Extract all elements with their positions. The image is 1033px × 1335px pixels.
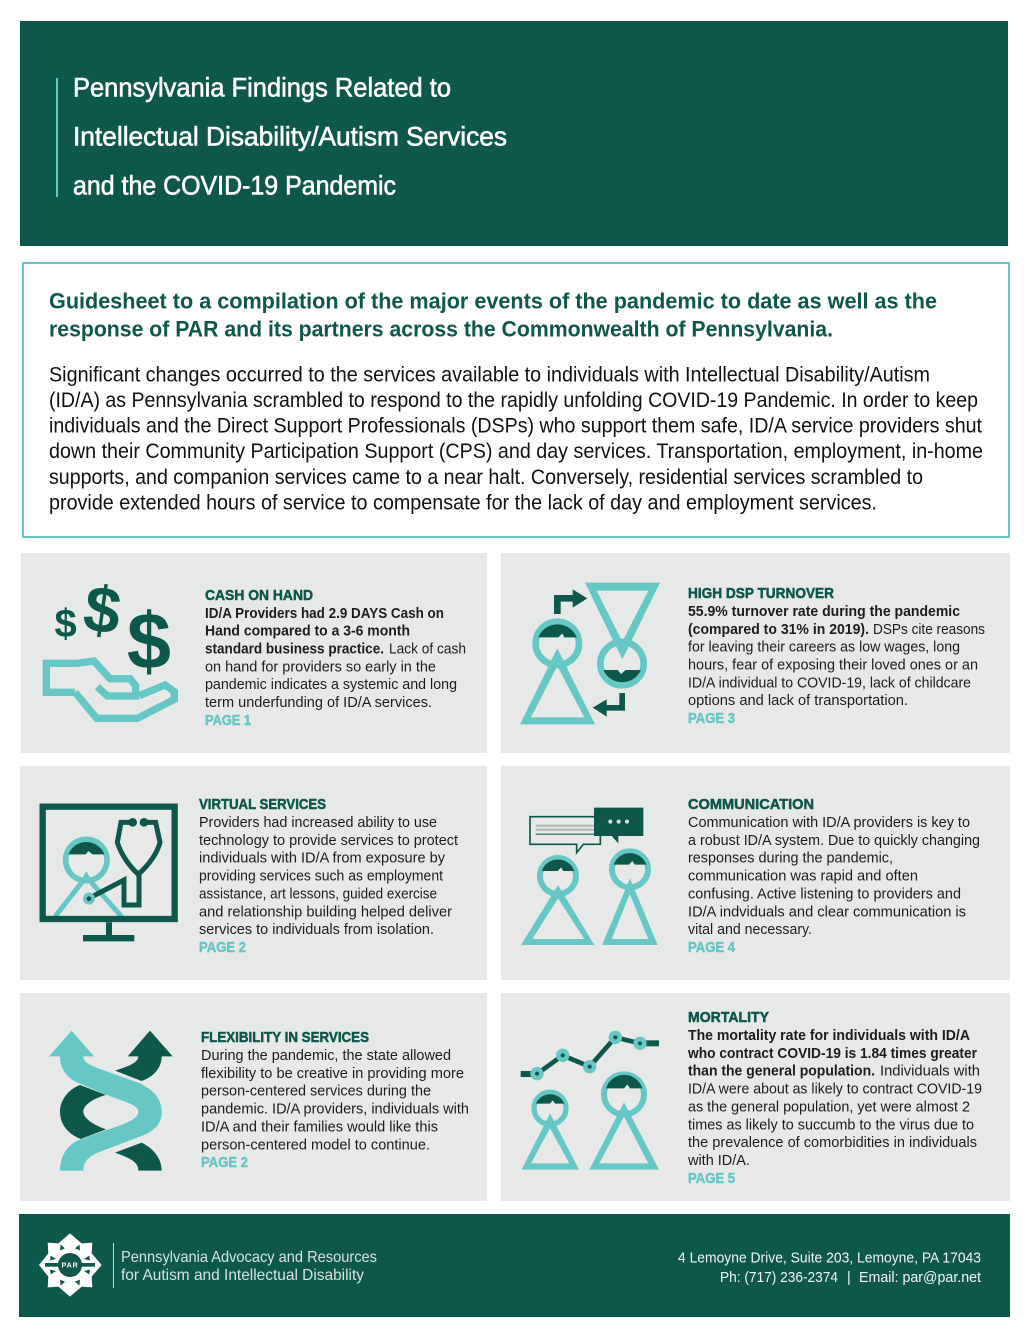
- virtual services text: [199, 797, 458, 956]
- panel: virtual services: [20, 766, 487, 980]
- intro paragraph: down their Community Participation Support (CPS) and day services. Transportation, employment, in-home: [49, 440, 983, 463]
- intro paragraph: Significant changes occurred to the services available to individuals with Intellectual Disability/Autism: [49, 364, 930, 386]
- flexibility in services text: During the pandemic, the state allowed: [201, 1048, 451, 1064]
- communication text: confusing. Active listening to providers and: [688, 886, 961, 902]
- icon: intertwined arrows: [49, 1031, 173, 1171]
- header banner: [20, 21, 1008, 246]
- cash on hand text: ID/A Providers had 2.9 DAYS Cash on: [205, 606, 444, 622]
- flexibility in services text: flexibility to be creative in providing more: [201, 1066, 464, 1082]
- intro heading: [49, 288, 937, 342]
- virtual services text: individuals with ID/A from exposure by: [199, 851, 446, 867]
- flexibility in services text: ID/A and their families would like this: [201, 1119, 438, 1135]
- flexibility in services text: person-centered services during the: [201, 1084, 431, 1100]
- icon: hand with dollar signs: $: [127, 596, 171, 685]
- cash on hand text: Hand compared to a 3-6 month: [205, 624, 410, 640]
- logo: PAR star: [39, 1233, 102, 1297]
- contact details: |: [847, 1270, 851, 1286]
- icon: hand with dollar signs: $: [79, 571, 125, 649]
- panel: flexibility in services: [20, 993, 487, 1201]
- organization name: [121, 1249, 377, 1284]
- virtual services text: technology to provide services to protect: [199, 833, 458, 849]
- communication text: vital and necessary.: [688, 922, 812, 938]
- flexibility in services text: [201, 1030, 469, 1171]
- high DSP turnover text: options and lack of transportation.: [688, 693, 908, 709]
- panel: cash on hand: [21, 553, 487, 753]
- flexibility in services text: FLEXIBILITY IN SERVICES: [201, 1030, 369, 1046]
- high DSP turnover text: HIGH DSP TURNOVER: [688, 586, 834, 602]
- communication text: PAGE 4: [688, 940, 736, 956]
- mortality text: [687, 1010, 982, 1187]
- intro paragraph: supports, and companion services came to a near halt. Conversely, residential services scrambled to: [49, 466, 923, 489]
- cash on hand text: pandemic indicates a systemic and long: [205, 677, 457, 693]
- flexibility in services text: PAGE 2: [201, 1155, 248, 1171]
- panel: introduction: [23, 263, 1009, 537]
- cash on hand text: [205, 588, 466, 729]
- mortality text: PAGE 5: [688, 1171, 735, 1187]
- high DSP turnover text: 55.9% turnover rate during the pandemic: [688, 604, 960, 620]
- communication text: COMMUNICATION: [688, 797, 814, 813]
- cash on hand text: CASH ON HAND: [205, 588, 313, 604]
- mortality text: ID/A were about as likely to contract COVID-19: [688, 1082, 982, 1098]
- mortality text: The mortality rate for individuals with ID/A: [688, 1028, 970, 1044]
- icon: hand with dollar signs: [46, 571, 174, 718]
- title: and the COVID-19 Pandemic: [73, 170, 396, 200]
- intro paragraph: individuals and the Direct Support Professionals (DSPs) who support them safe, ID/A service providers shut: [49, 414, 982, 438]
- virtual services text: and relationship building helped deliver: [199, 904, 452, 920]
- title: [73, 72, 507, 200]
- mortality text: than the general population.: [688, 1064, 875, 1080]
- contact details: Ph: (717) 236-2374: [720, 1270, 838, 1286]
- virtual services text: assistance, art lessons, guided exercise: [199, 886, 437, 902]
- high DSP turnover text: [688, 586, 985, 727]
- high DSP turnover text: for leaving their careers as low wages, long: [688, 640, 960, 656]
- communication text: communication was rapid and often: [688, 869, 918, 885]
- mortality text: who contract COVID-19 is 1.84 times greater: [687, 1046, 977, 1062]
- intro paragraph: [49, 364, 983, 514]
- organization name: Pennsylvania Advocacy and Resources: [121, 1249, 377, 1266]
- virtual services text: services to individuals from isolation.: [199, 922, 434, 938]
- mortality text: times as likely to succumb to the virus due to: [688, 1117, 974, 1133]
- communication text: responses during the pandemic,: [688, 851, 893, 867]
- cash on hand text: term underfunding of ID/A services.: [205, 695, 432, 711]
- communication text: ID/A indviduals and clear communication is: [688, 904, 966, 920]
- high DSP turnover text: hours, fear of exposing their loved ones or an: [688, 658, 978, 674]
- icon: two people swapping: [520, 583, 660, 724]
- mortality text: with ID/A.: [687, 1153, 750, 1169]
- cash on hand text: Lack of cash: [389, 642, 466, 658]
- flexibility in services text: person-centered model to continue.: [201, 1137, 430, 1153]
- contact details: 4 Lemoyne Drive, Suite 203, Lemoyne, PA 17043: [678, 1250, 981, 1266]
- title: Intellectual Disability/Autism Services: [73, 122, 507, 152]
- intro paragraph: (ID/A) as Pennsylvania scrambled to respond to the rapidly unfolding COVID-19 Pandemic. In order to keep: [49, 389, 978, 412]
- mortality text: Individuals with: [880, 1064, 980, 1080]
- icon: people and line chart: [521, 1031, 659, 1170]
- virtual services text: providing services such as employment: [199, 869, 443, 885]
- high DSP turnover text: DSPs cite reasons: [873, 622, 985, 638]
- panel: communication: [501, 766, 1010, 980]
- icon: two people talking: [521, 808, 658, 945]
- intro paragraph: provide extended hours of service to compensate for the lack of day and employment services.: [49, 492, 877, 514]
- high DSP turnover text: (compared to 31% in 2019).: [688, 622, 869, 638]
- communication text: [688, 797, 980, 956]
- organization name: for Autism and Intellectual Disability: [121, 1267, 364, 1284]
- mortality text: MORTALITY: [688, 1010, 769, 1026]
- cash on hand text: PAGE 1: [205, 713, 251, 729]
- icon: hand with dollar signs: $: [55, 602, 77, 646]
- virtual services text: VIRTUAL SERVICES: [199, 797, 326, 813]
- logo: PAR star: PAR: [62, 1261, 78, 1270]
- virtual services text: Providers had increased ability to use: [199, 815, 437, 831]
- communication text: a robust ID/A system. Due to quickly changing: [688, 833, 980, 849]
- panel: high DSP turnover: [501, 553, 1010, 753]
- communication text: Communication with ID/A providers is key to: [688, 815, 970, 831]
- cash on hand text: standard business practice.: [205, 642, 384, 658]
- intro heading: Guidesheet to a compilation of the major events of the pandemic to date as well as the: [49, 288, 937, 314]
- mortality text: the prevalence of comorbidities in individuals: [688, 1135, 977, 1151]
- high DSP turnover text: ID/A individual to COVID-19, lack of childcare: [688, 675, 971, 691]
- icon: telehealth monitor: [43, 807, 175, 941]
- high DSP turnover text: PAGE 3: [688, 711, 735, 727]
- contact details: [678, 1250, 981, 1286]
- contact details: Email: par@par.net: [859, 1270, 981, 1286]
- cash on hand text: on hand for providers so early in the: [205, 659, 436, 675]
- footer: [19, 1214, 1010, 1317]
- title: Pennsylvania Findings Related to: [73, 72, 451, 102]
- virtual services text: PAGE 2: [199, 940, 246, 956]
- flexibility in services text: pandemic. ID/A providers, individuals with: [201, 1102, 469, 1118]
- intro heading: response of PAR and its partners across the Commonwealth of Pennsylvania.: [49, 316, 833, 342]
- panel: mortality: [501, 993, 1010, 1201]
- mortality text: as the general population, yet were almost 2: [688, 1099, 970, 1115]
